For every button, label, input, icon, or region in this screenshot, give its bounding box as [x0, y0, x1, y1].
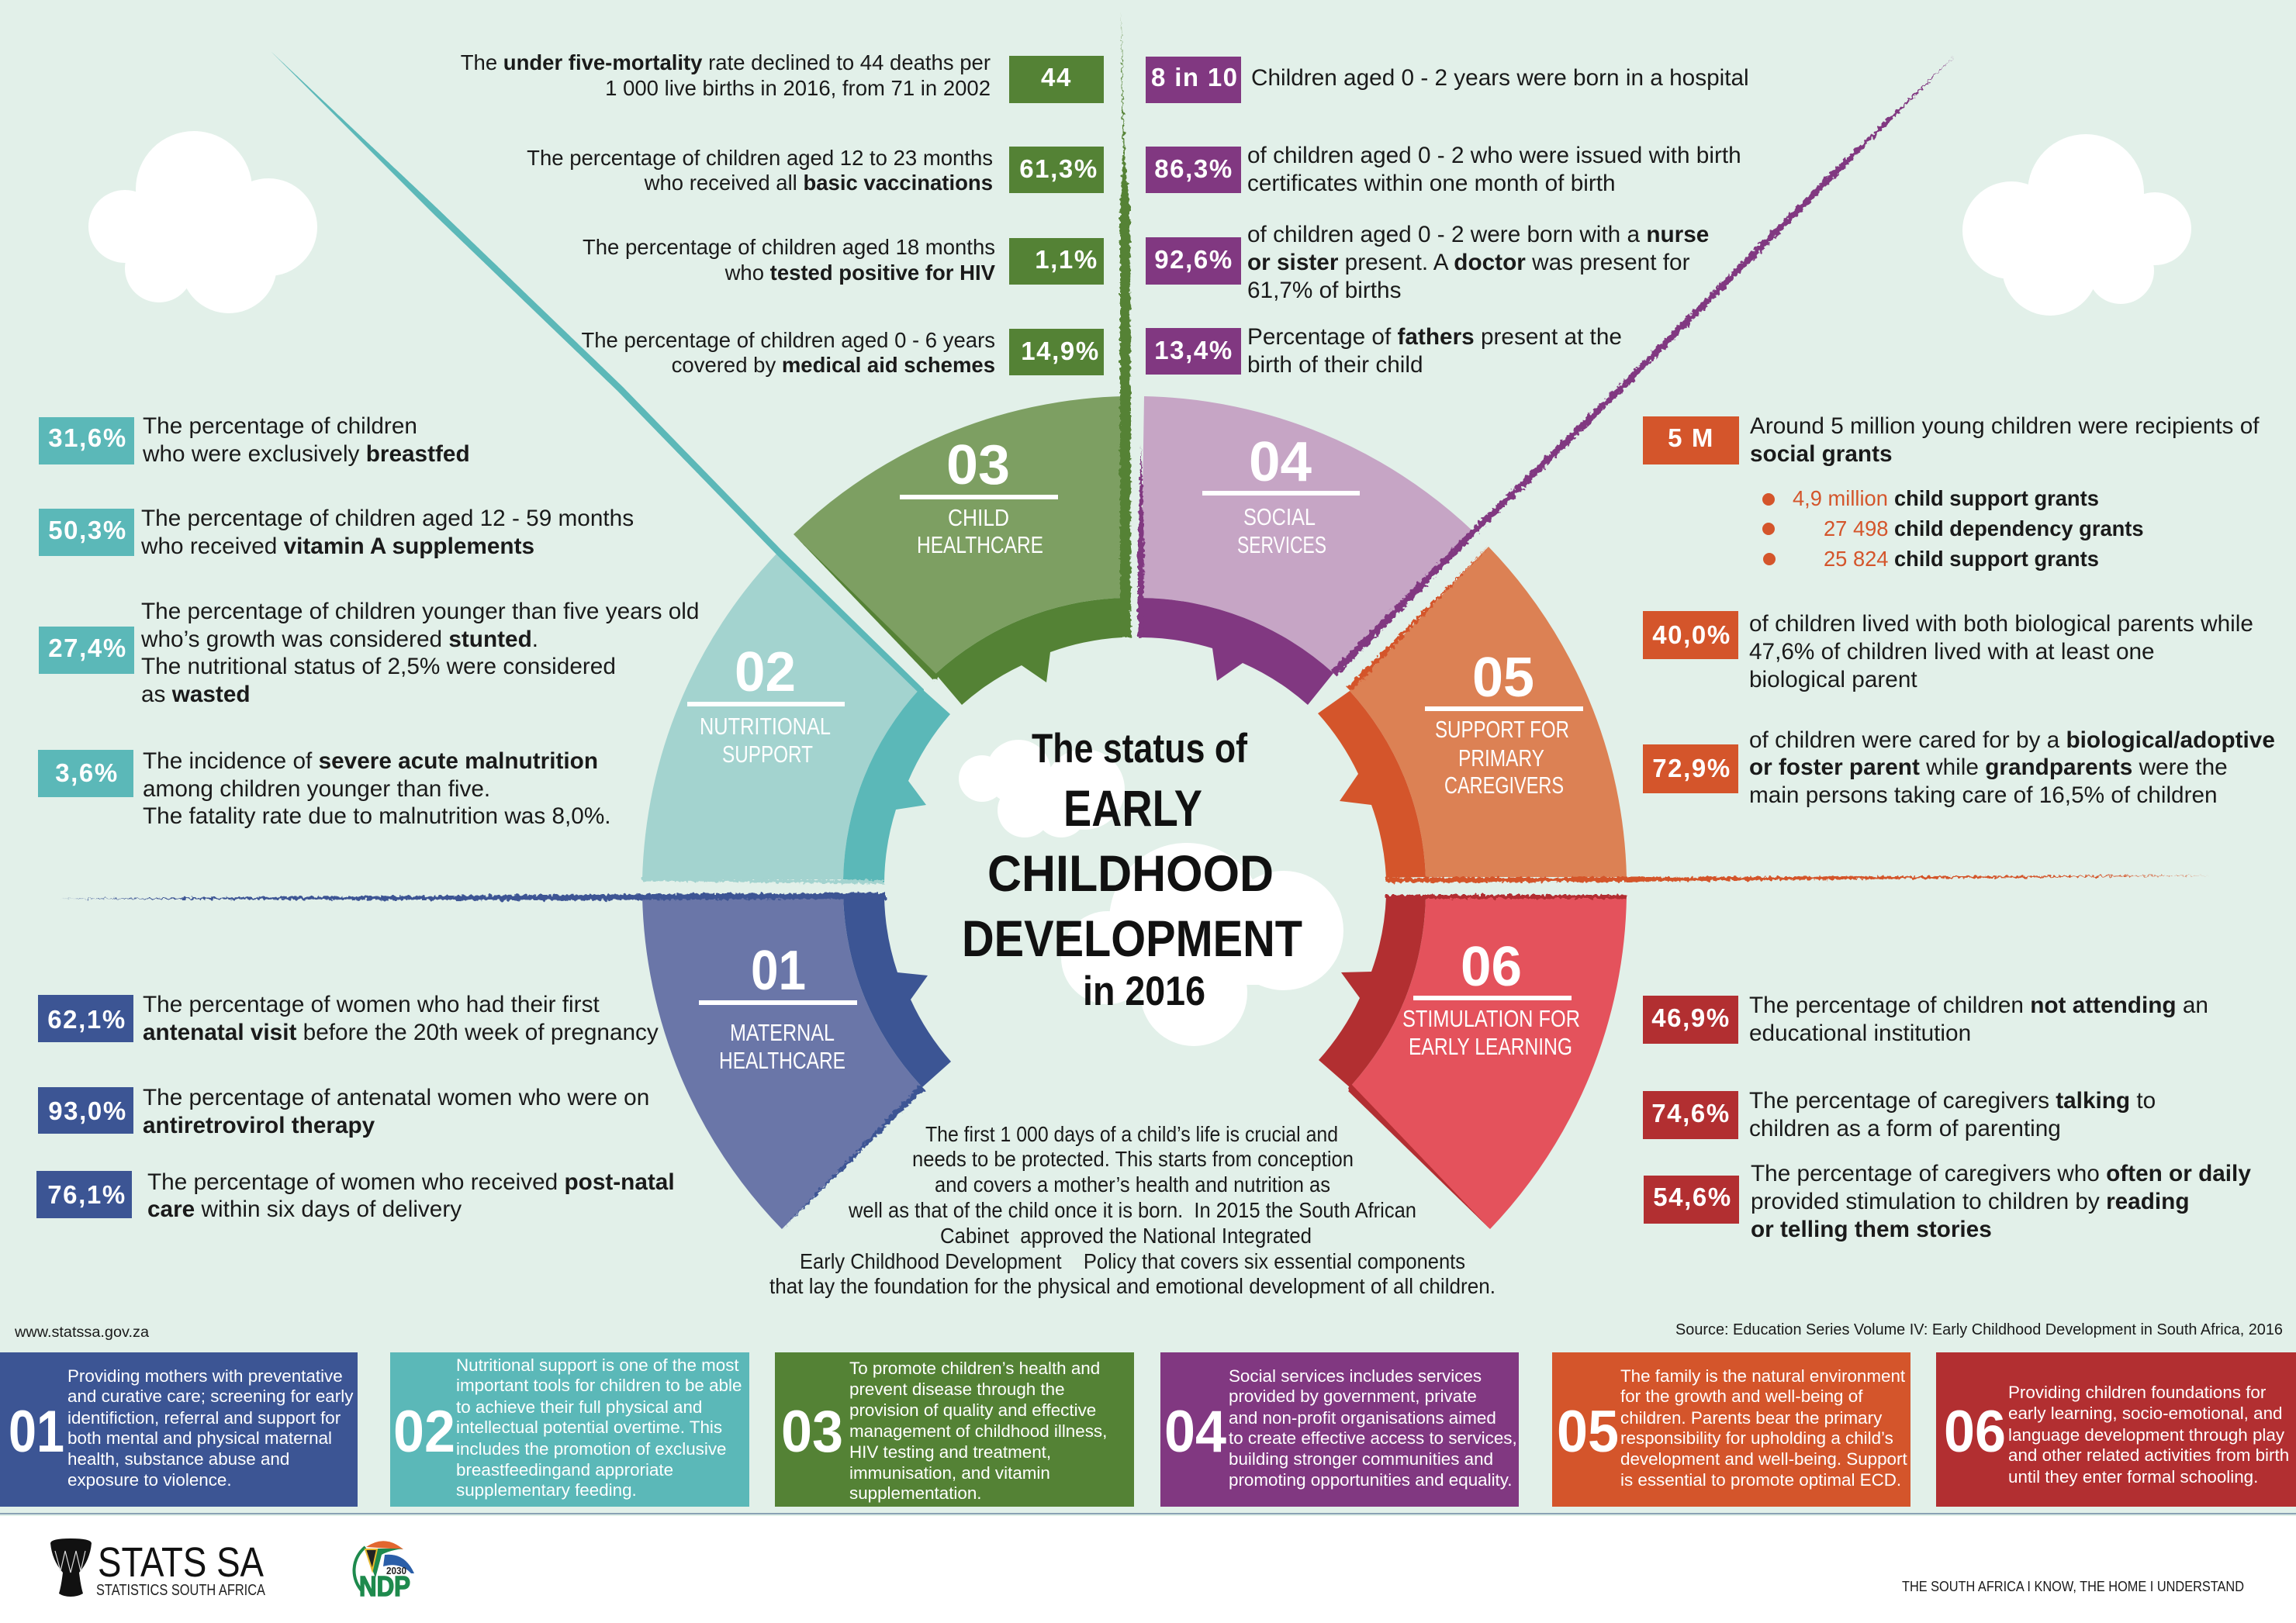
description card 05: 05 — [1557, 1399, 1619, 1465]
description card 06 — [1936, 1352, 2296, 1507]
stat: 46,9% not attending — [1643, 993, 2208, 1046]
stat: 50,3% vitamin A — [39, 506, 634, 559]
panel: maternal healthcare stats — [36, 992, 675, 1222]
stat: 93,0% antiretroviral therapy — [38, 1085, 649, 1138]
description card 02 — [390, 1352, 749, 1507]
stat: 92,6% nurse or sister: or sister present. A doctor was present for — [1247, 250, 1690, 275]
segment 04: social services — [1141, 396, 1474, 705]
segment 05: support for primary caregivers: SUPPORT FOR — [1435, 716, 1569, 743]
cloud: centre upper — [959, 740, 1125, 837]
segment 06: stimulation for early learning: 06 — [1461, 936, 1522, 998]
description card 02: Nutritional support is one of the most — [456, 1355, 739, 1375]
segment 05: support for primary caregivers: 05 — [1472, 647, 1534, 709]
panel: child healthcare stats — [461, 50, 1104, 377]
stat: 54,6% reading — [1644, 1161, 2251, 1242]
segment 04: social services: SERVICES — [1237, 531, 1326, 558]
source note: Source: Education Series Volume IV: Early Childhood Development in South Africa, 2016 — [1675, 1321, 2283, 1338]
stat: 72,9% cared for by parent: 72,9% — [1652, 754, 1731, 782]
intro paragraph: Early Childhood Development Policy that covers six essential components — [800, 1249, 1465, 1273]
stat: 54,6% reading: provided stimulation to children by reading — [1751, 1189, 2190, 1214]
stat: 86,3% birth certificates: of children aged 0 - 2 who were issued with birth — [1247, 143, 1741, 168]
stat: 31,6% breastfed: who were exclusively breastfed — [142, 441, 470, 467]
segment 05: support for primary caregivers — [1318, 547, 1627, 878]
stat: 8 in 10 born in hospital: 8 in 10 — [1151, 63, 1237, 92]
description card 04: building stronger communities and — [1229, 1449, 1493, 1469]
stat: 44 under-five mortality — [461, 50, 1104, 103]
description card 03: provision of quality and effective — [849, 1400, 1096, 1420]
title — [962, 726, 1302, 1014]
stat: 14,9% medical aid: The percentage of children aged 0 - 6 years — [581, 328, 995, 352]
description card 01: health, substance abuse and — [67, 1449, 289, 1469]
description card 02: to achieve their full physical and — [456, 1397, 702, 1417]
stat: 72,9% cared for by parent — [1643, 727, 2275, 808]
stat: 46,9% not attending: The percentage of children not attending an — [1749, 993, 2208, 1018]
stat: 54,6% reading: The percentage of caregivers who often or daily — [1751, 1161, 2251, 1186]
stat: 93,0% antiretroviral therapy: antiretrovirol therapy — [143, 1113, 375, 1138]
stat: 93,0% antiretroviral therapy: The percentage of antenatal women who were on — [143, 1085, 649, 1110]
stat: 76,1% post-natal care: The percentage of women who received post-natal — [147, 1169, 675, 1195]
description card 03 — [775, 1352, 1134, 1507]
list: grant types: child dependency grants — [1894, 516, 2144, 540]
logo: NDP 2030: 2030 — [386, 1565, 406, 1576]
stat: 62,1% antenatal visit: The percentage of women who had their first — [143, 992, 600, 1017]
stat: 27,4% stunted: 27,4% — [48, 634, 127, 662]
description card 01: exposure to violence. — [67, 1470, 232, 1490]
description card 03: management of childhood illness, — [849, 1421, 1107, 1441]
list: grant types — [1762, 486, 2144, 571]
description card 06: Providing children foundations for — [2008, 1383, 2267, 1402]
logo: NDP 2030 — [354, 1541, 414, 1602]
stat: 8 in 10 born in hospital: Children aged 0 - 2 years were born in a hospital — [1251, 65, 1749, 91]
description card 05: for the growth and well-being of — [1620, 1386, 1863, 1406]
intro paragraph — [769, 1122, 1496, 1298]
segment 03: child healthcare: 03 — [946, 434, 1010, 496]
stat: 74,6% talking: 74,6% — [1651, 1099, 1731, 1127]
segment 06: stimulation for early learning: EARLY LEARNING — [1409, 1033, 1572, 1060]
stat: 13,4% fathers present: 13,4% — [1154, 336, 1233, 364]
description card 03: immunisation, and vitamin — [849, 1463, 1050, 1483]
stat: 92,6% nurse or sister: 92,6% — [1154, 245, 1233, 274]
stat: 13,4% fathers present: birth of their child — [1247, 352, 1423, 378]
stat: 5 M social grants: social grants — [1750, 441, 1893, 467]
intro paragraph: that lay the foundation for the physical and emotional development of all children. — [769, 1274, 1496, 1298]
panel: primary caregivers stats — [1643, 413, 2275, 808]
stat: 13,4% fathers present — [1146, 324, 1622, 378]
title: The status of — [1032, 726, 1247, 772]
description card 04: Social services includes services — [1229, 1366, 1482, 1386]
title: CHILDHOOD — [987, 844, 1274, 902]
description card 04: provided by government, private — [1229, 1386, 1477, 1406]
description card 04: 04 — [1164, 1399, 1226, 1465]
panel: early learning stats — [1643, 993, 2251, 1242]
stat: 46,9% not attending: 46,9% — [1651, 1003, 1731, 1032]
description card 02: supplementary feeding. — [456, 1480, 637, 1500]
logo: Stats SA — [50, 1538, 266, 1599]
description card 05: children. Parents bear the primary — [1620, 1408, 1883, 1428]
stat: 14,9% medical aid — [581, 328, 1104, 377]
stat: 44 under-five mortality: 1 000 live births in 2016, from 71 in 2002 — [605, 76, 991, 100]
description card 01 — [0, 1352, 358, 1507]
list: grant types: 4,9 million — [1793, 486, 1888, 510]
stat: 1,1% positive for HIV: The percentage of children aged 18 months — [583, 235, 995, 259]
stat: 46,9% not attending: educational institution — [1749, 1020, 1971, 1046]
description card 05: responsibility for upholding a child’s — [1620, 1428, 1893, 1448]
segment 02: nutritional support — [642, 551, 950, 882]
title: DEVELOPMENT — [962, 910, 1302, 967]
stat: 50,3% vitamin A: The percentage of children aged 12 - 59 months — [141, 506, 634, 531]
description card 04: promoting opportunities and equality. — [1229, 1470, 1513, 1490]
stat: 40,0% both biological parents: of children lived with both biological parents while — [1749, 611, 2253, 637]
stat: 27,4% stunted: as wasted — [141, 682, 251, 707]
segment 01: maternal healthcare: 01 — [751, 940, 806, 1002]
intro paragraph: needs to be protected. This starts from conception — [912, 1147, 1354, 1171]
stat: 92,6% nurse or sister: of children aged 0 - 2 were born with a nurse — [1247, 222, 1709, 247]
description card 06: 06 — [1944, 1399, 2006, 1465]
list: grant types: 27 498 — [1824, 516, 1888, 540]
stat: 44 under-five mortality: The under five-mortality rate declined to 44 deaths per — [461, 50, 991, 74]
stat: 5 M social grants: 5 M — [1668, 423, 1714, 452]
description card 01: and curative care; screening for early — [67, 1386, 354, 1406]
cloud: centre lower — [1061, 843, 1343, 1046]
logo: NDP 2030: NDP — [359, 1570, 410, 1602]
list: grant types: child support grants — [1894, 486, 2099, 510]
stat: 74,6% talking: The percentage of caregivers talking to — [1749, 1088, 2156, 1114]
stat: 3,6% severe acute malnutrition: The incidence of severe acute malnutrition — [143, 748, 598, 774]
stat: 86,3% birth certificates: certificates within one month of birth — [1247, 171, 1616, 196]
logo: Stats SA: STATS SA — [98, 1539, 264, 1586]
description card 06: until they enter formal schooling. — [2008, 1467, 2258, 1487]
stat: 72,9% cared for by parent: or foster parent while grandparents were the — [1749, 755, 2228, 780]
stat: 8 in 10 born in hospital — [1146, 57, 1749, 103]
stat: 74,6% talking — [1643, 1088, 2156, 1141]
description card 04 — [1160, 1352, 1519, 1507]
segment 05: support for primary caregivers: PRIMARY — [1458, 744, 1544, 772]
description card 06: language development through play — [2008, 1425, 2285, 1445]
segment 06: stimulation for early learning — [1319, 896, 1627, 1229]
stat: 44 under-five mortality: 44 — [1041, 63, 1072, 92]
stat: 1,1% positive for HIV — [583, 235, 1104, 285]
segment 03: child healthcare: CHILD — [948, 504, 1009, 531]
stat: 61,3% basic vaccinations — [527, 146, 1104, 195]
description card 01: Providing mothers with preventative — [67, 1366, 343, 1386]
description card 02: important tools for children to be able — [456, 1376, 742, 1395]
title: in 2016 — [1083, 969, 1205, 1014]
stat: 86,3% birth certificates: 86,3% — [1154, 154, 1233, 183]
stat: 27,4% stunted — [39, 599, 699, 707]
stat: 3,6% severe acute malnutrition — [38, 748, 611, 829]
stat: 61,3% basic vaccinations: 61,3% — [1019, 154, 1098, 183]
stat: 50,3% vitamin A: who received vitamin A supplements — [140, 534, 534, 559]
footer band — [0, 1513, 2296, 1623]
stat: 1,1% positive for HIV: who tested positive for HIV — [724, 261, 996, 285]
description card 02: 02 — [393, 1399, 455, 1465]
cloud: top right — [1962, 134, 2191, 316]
logo: Stats SA: STATISTICS SOUTH AFRICA — [96, 1582, 266, 1599]
stat: 62,1% antenatal visit: antenatal visit before the 20th week of pregnancy — [143, 1020, 659, 1045]
description card 06: early learning, socio-emotional, and — [2008, 1404, 2282, 1423]
segment 01: maternal healthcare — [642, 896, 951, 1229]
stat: 3,6% severe acute malnutrition: The fatality rate due to malnutrition was 8,0%. — [143, 803, 611, 829]
segment 01: maternal healthcare: HEALTHCARE — [719, 1047, 845, 1074]
stat: 27,4% stunted: who’s growth was considered stunted. — [140, 627, 538, 652]
description card 03: 03 — [781, 1399, 843, 1465]
description card 03: prevent disease through the — [849, 1380, 1065, 1399]
stat: 86,3% birth certificates — [1146, 143, 1741, 196]
stat: 93,0% antiretroviral therapy: 93,0% — [48, 1096, 127, 1125]
segment 02: nutritional support: SUPPORT — [722, 741, 813, 768]
stat: 13,4% fathers present: Percentage of fathers present at the — [1247, 324, 1622, 350]
description card 02: includes the promotion of exclusive — [456, 1439, 726, 1459]
stat: 27,4% stunted: The nutritional status of 2,5% were considered — [141, 654, 616, 679]
cloud: top left — [88, 131, 317, 313]
segment 03: child healthcare — [794, 396, 1122, 705]
stat: 40,0% both biological parents — [1643, 611, 2253, 692]
description card 06: and other related activities from birth — [2008, 1445, 2289, 1465]
description card 01: identifiction, referral and support for — [67, 1408, 341, 1428]
title: EARLY — [1063, 779, 1202, 837]
stat: 31,6% breastfed: 31,6% — [48, 423, 127, 452]
stat: 3,6% severe acute malnutrition: among children younger than five. — [143, 776, 490, 802]
stat: 40,0% both biological parents: 47,6% of children lived with at least one — [1749, 639, 2155, 665]
rough lines radiating from the semicircle — [59, 12, 2211, 1229]
segment 03: child healthcare: HEALTHCARE — [917, 531, 1043, 558]
segment 04: social services: 04 — [1249, 431, 1312, 493]
stat: 40,0% both biological parents: biological parent — [1749, 667, 1917, 692]
stat: 1,1% positive for HIV: 1,1% — [1035, 245, 1098, 274]
stat: 72,9% cared for by parent: of children were cared for by a biological/adoptive — [1749, 727, 2275, 753]
website url: www.statssa.gov.za — [14, 1324, 149, 1341]
panel: social services stats — [1146, 57, 1749, 378]
stat: 76,1% post-natal care: care within six days of delivery — [147, 1197, 462, 1222]
description card 01: both mental and physical maternal — [67, 1428, 332, 1448]
stat: 54,6% reading: 54,6% — [1653, 1183, 1732, 1211]
list: grant types: 25 824 — [1824, 547, 1888, 571]
tagline: THE SOUTH AFRICA I KNOW, THE HOME I UNDERSTAND — [1902, 1579, 2244, 1594]
stat: 61,3% basic vaccinations: The percentage of children aged 12 to 23 months — [527, 146, 993, 170]
segment 01: maternal healthcare: MATERNAL — [730, 1019, 835, 1046]
stat: 5 M social grants: Around 5 million young children were recipients of — [1750, 413, 2260, 439]
description card 03: To promote children’s health and — [849, 1359, 1100, 1378]
intro paragraph: and covers a mother’s health and nutrition as — [935, 1172, 1330, 1197]
description card 05: The family is the natural environment — [1620, 1366, 1906, 1386]
stat: 62,1% antenatal visit — [38, 992, 659, 1045]
stat: 74,6% talking: children as a form of parenting — [1749, 1116, 2061, 1141]
stat: 14,9% medical aid: covered by medical aid schemes — [672, 353, 995, 377]
segment 02: nutritional support: NUTRITIONAL — [700, 713, 831, 740]
stat: 5 M social grants — [1643, 413, 2260, 467]
stat: 76,1% post-natal care: 76,1% — [47, 1180, 126, 1209]
intro paragraph: well as that of the child once it is born. In 2015 the South African — [848, 1198, 1416, 1222]
stat: 72,9% cared for by parent: main persons taking care of 16,5% of children — [1749, 782, 2218, 808]
segment 02: nutritional support: 02 — [735, 641, 796, 703]
stat: 76,1% post-natal care — [36, 1169, 675, 1222]
stat: 50,3% vitamin A: 50,3% — [48, 516, 127, 544]
description card 02: breastfeedingand approriate — [456, 1460, 673, 1480]
description card 04: and non-profit organisations aimed — [1229, 1408, 1496, 1428]
panel: nutritional support stats — [38, 413, 699, 829]
description card 03: supplementation. — [849, 1483, 982, 1503]
segment 04: social services: SOCIAL — [1243, 503, 1316, 530]
intro paragraph: The first 1 000 days of a child’s life is crucial and — [925, 1122, 1338, 1146]
stat: 3,6% severe acute malnutrition: 3,6% — [55, 758, 119, 787]
stat: 54,6% reading: or telling them stories — [1751, 1217, 1992, 1242]
description card 05: development and well-being. Support — [1620, 1449, 1907, 1469]
description card 05: is essential to promote optimal ECD. — [1620, 1470, 1901, 1490]
stat: 31,6% breastfed: The percentage of children — [143, 413, 417, 439]
intro paragraph: Cabinet approved the National Integrated — [940, 1224, 1312, 1248]
segment 06: stimulation for early learning: STIMULATION FOR — [1402, 1005, 1580, 1032]
description card 03: HIV testing and treatment, — [849, 1442, 1051, 1462]
stat: 31,6% breastfed — [39, 413, 470, 467]
list: grant types: child support grants — [1894, 547, 2099, 571]
stat: 40,0% both biological parents: 40,0% — [1652, 620, 1731, 649]
description card 04: to create effective access to services, — [1229, 1428, 1517, 1448]
description card 02: intellectual potential overtime. This — [456, 1418, 722, 1437]
stat: 62,1% antenatal visit: 62,1% — [47, 1005, 126, 1034]
description card 01: 01 — [9, 1399, 64, 1465]
stat: 61,3% basic vaccinations: who received all basic vaccinations — [644, 171, 993, 195]
stat: 27,4% stunted: The percentage of children younger than five years old — [141, 599, 699, 624]
stat: 92,6% nurse or sister — [1146, 222, 1709, 303]
stat: 92,6% nurse or sister: 61,7% of births — [1247, 278, 1401, 303]
segment 05: support for primary caregivers: CAREGIVERS — [1444, 772, 1564, 799]
description card 05 — [1552, 1352, 1910, 1507]
stat: 14,9% medical aid: 14,9% — [1021, 337, 1100, 365]
